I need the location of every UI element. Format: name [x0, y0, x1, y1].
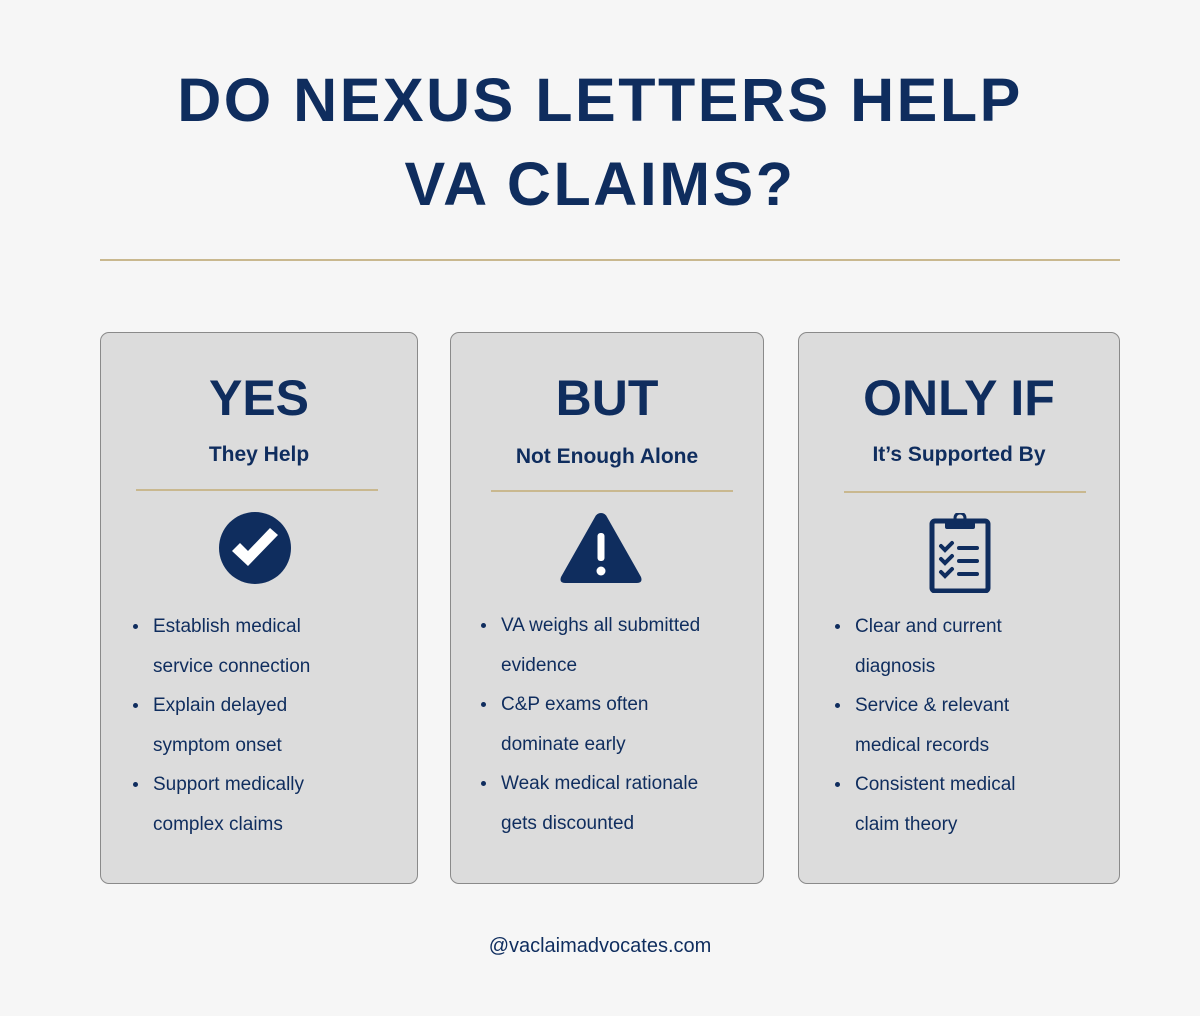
bullets: but: Weak medical rationale [501, 773, 698, 794]
bullets: only if: claim theory [855, 814, 957, 834]
bullets: but: evidence [501, 654, 577, 676]
bullets: but: gets discounted [501, 812, 634, 834]
icon: check circle [219, 512, 291, 584]
bullets: yes: symptom onset [153, 734, 282, 756]
bullets: yes: service connection [153, 656, 310, 676]
subheading: not enough alone: Not Enough Alone [516, 445, 698, 468]
bullets: but: dominate early [501, 734, 626, 754]
title: VA CLAIMS? [404, 150, 795, 218]
bullets: but [481, 615, 700, 834]
bullets: only if: Clear and current [855, 616, 1002, 637]
bullets: yes: Support medically [153, 774, 304, 795]
bullets: only if: Service & relevant [855, 695, 1009, 716]
heading: only if: ONLY IF [863, 370, 1055, 426]
subheading: supported by: It’s Supported By [872, 443, 1046, 466]
title: DO NEXUS LETTERS HELP [177, 66, 1023, 134]
panel: only if [798, 332, 1120, 884]
bullets: yes: complex claims [153, 814, 283, 834]
heading: but: BUT [556, 370, 658, 426]
panel: yes [100, 332, 418, 884]
bullets: yes [133, 616, 310, 834]
bullets: only if: medical records [855, 734, 989, 756]
icon: warning triangle [560, 513, 642, 583]
footer handle: @vaclaimadvocates.com [489, 935, 711, 957]
bullets: but: C&P exams often [501, 694, 649, 715]
title [177, 66, 1023, 218]
bullets: but: VA weighs all submitted [501, 615, 700, 636]
bullets: only if [835, 616, 1016, 834]
bullets: only if: diagnosis [855, 656, 935, 676]
subheading: they help: They Help [209, 443, 309, 466]
heading: yes: YES [209, 370, 309, 426]
bullets: yes: Explain delayed [153, 695, 287, 716]
panel: but [450, 332, 764, 884]
icon: clipboard [930, 513, 990, 593]
bullets: only if: Consistent medical [855, 774, 1016, 795]
bullets: yes: Establish medical [153, 616, 301, 637]
